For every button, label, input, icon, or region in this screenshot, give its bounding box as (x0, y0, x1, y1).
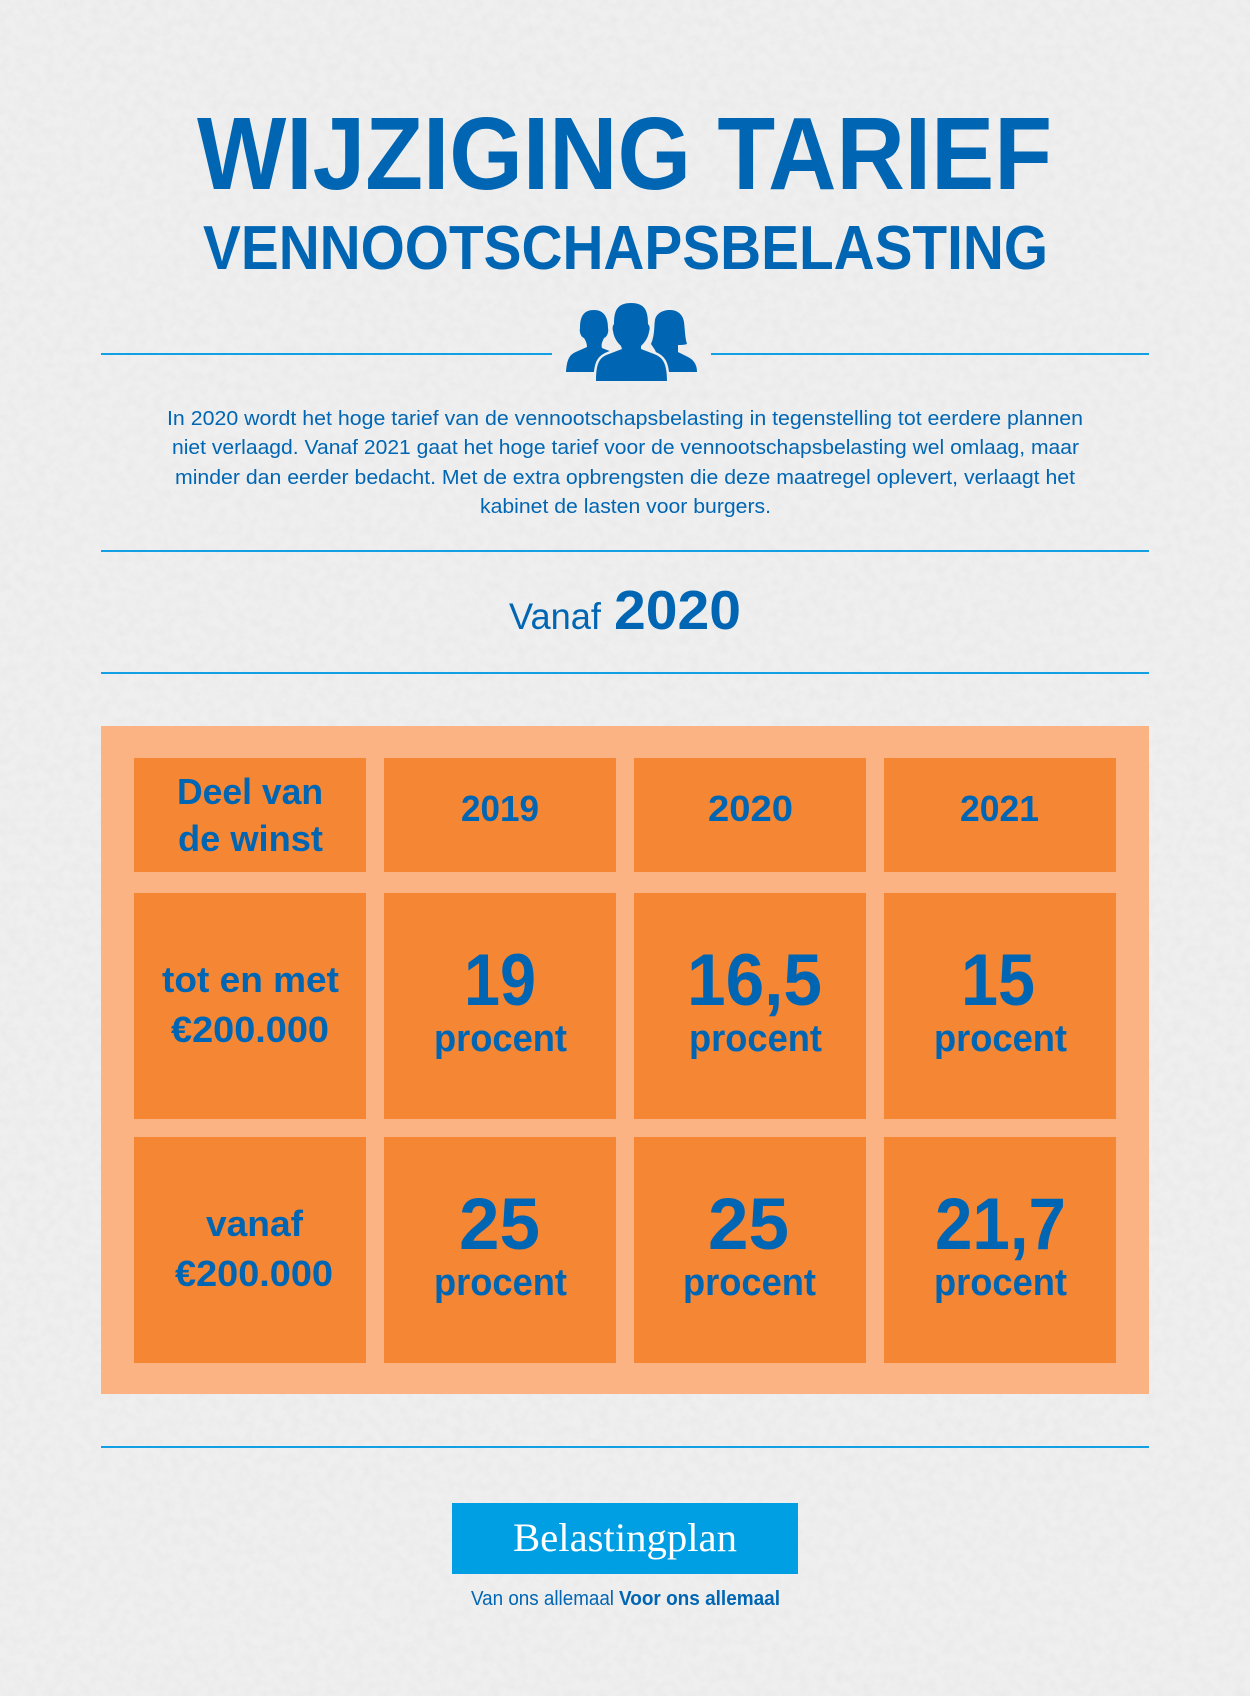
header: 2020 (634, 758, 866, 872)
intro paragraph (167, 408, 1083, 518)
heading: vanaf 2020: Vanaf (509, 596, 602, 637)
cell: 25 procent 2019: 25 (459, 1184, 540, 1265)
cell: 16,5 procent (634, 893, 866, 1119)
subtitle: VENNOOTSCHAPSBELASTING (203, 214, 1048, 283)
header: deel van de winst: de winst (178, 818, 323, 859)
cell: 15 procent (884, 893, 1116, 1119)
cell: 25 procent 2019 (384, 1137, 616, 1363)
heading: vanaf 2020: 2020 (614, 579, 741, 641)
header: 2019: 2019 (461, 788, 539, 829)
cell: 16,5 procent: 16,5 (687, 940, 822, 1021)
cell: 21,7 procent: procent (934, 1262, 1067, 1304)
row label: vanaf 200.000: vanaf (206, 1203, 304, 1244)
tagline: Voor ons allemaal (619, 1588, 780, 1610)
cell: 25 procent 2020: 25 (708, 1184, 789, 1265)
tagline: Van ons allemaal (471, 1588, 614, 1610)
header: 2021: 2021 (960, 788, 1039, 829)
cell: 15 procent: procent (934, 1018, 1067, 1060)
intro paragraph: In 2020 wordt het hoge tarief van de vennootschapsbelasting in tegenstelling tot eerdere plannen (167, 408, 1083, 430)
cell: 19 procent (384, 893, 616, 1119)
cell: 19 procent: procent (434, 1018, 567, 1060)
row label: tot en met 200.000: tot en met (162, 959, 339, 1000)
intro paragraph: kabinet de lasten voor burgers. (480, 496, 771, 518)
header: 2019 (384, 758, 616, 872)
row label: vanaf 200.000 (134, 1137, 366, 1363)
heading: vanaf 2020 (509, 579, 741, 641)
intro paragraph: minder dan eerder bedacht. Met de extra opbrengsten die deze maatregel oplevert, verlaagt het (175, 467, 1075, 489)
title: WIJZIGING TARIEF (197, 96, 1052, 211)
cell: 21,7 procent: 21,7 (935, 1184, 1066, 1265)
tagline (471, 1588, 780, 1610)
header: 2020: 2020 (708, 788, 793, 829)
cell: 25 procent 2020 (634, 1137, 866, 1363)
cell: 16,5 procent: procent (689, 1018, 822, 1060)
intro paragraph: niet verlaagd. Vanaf 2021 gaat het hoge tarief voor de vennootschapsbelasting wel omlaag, maar (172, 437, 1079, 459)
header: deel van de winst: Deel van (177, 771, 323, 812)
row label: vanaf 200.000: €200.000 (175, 1253, 333, 1294)
cell: 21,7 procent (884, 1137, 1116, 1363)
header: 2021 (884, 758, 1116, 872)
badge: belastingplan (452, 1503, 798, 1574)
cell: 25 procent 2019: procent (434, 1262, 567, 1304)
icon: group of three people (566, 303, 697, 381)
header: deel van de winst (134, 758, 366, 872)
row label: tot en met 200.000: €200.000 (171, 1009, 329, 1050)
badge: belastingplan: Belastingplan (513, 1515, 737, 1560)
cell: 25 procent 2020: procent (683, 1262, 816, 1304)
panel: tariff table (101, 726, 1149, 1394)
cell: 15 procent: 15 (961, 940, 1035, 1021)
row label: tot en met 200.000 (134, 893, 366, 1119)
cell: 19 procent: 19 (464, 940, 536, 1021)
